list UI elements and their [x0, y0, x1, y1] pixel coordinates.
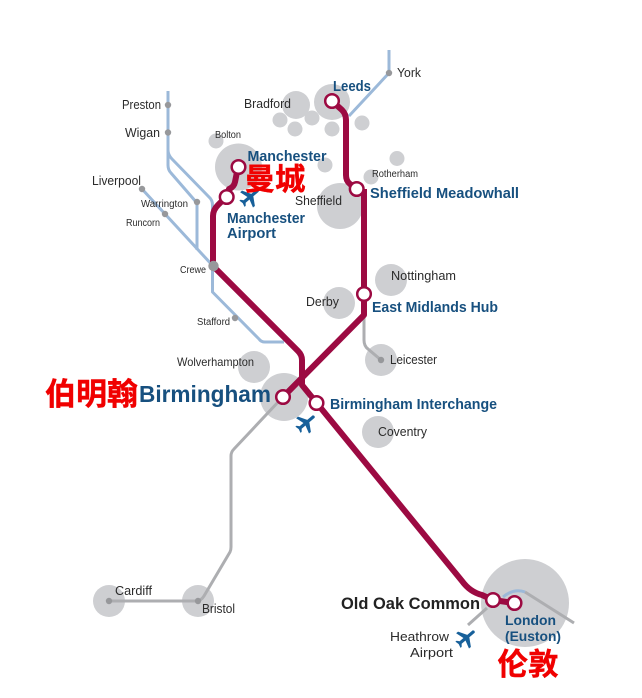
HS2 high speed line [213, 101, 514, 603]
icon: plane Birmingham Interchange [292, 408, 321, 437]
secondary city labels: Coventry [378, 424, 427, 439]
secondary city labels: Wigan [125, 125, 160, 140]
station labels: Birmingham Interchange [330, 396, 497, 413]
classic lines: grey [109, 315, 574, 625]
secondary city labels [92, 65, 456, 660]
secondary city labels: Bradford [244, 96, 291, 111]
secondary city labels: Liverpool [92, 173, 141, 188]
secondary city labels: Leicester [390, 352, 438, 367]
station labels: Birmingham [139, 381, 271, 407]
secondary city labels: York [397, 65, 421, 80]
secondary city labels: Warrington [141, 199, 188, 210]
secondary city labels: Derby [306, 294, 339, 309]
station labels: Sheffield Meadowhall [370, 185, 519, 202]
secondary city labels: Wolverhampton [177, 355, 254, 369]
station labels: Old Oak Common [341, 594, 480, 613]
secondary city labels: Bristol [202, 601, 235, 616]
station labels: (Euston) [505, 628, 561, 644]
HS2 stations [220, 94, 521, 610]
secondary city labels: Nottingham [391, 268, 456, 283]
classic lines: blue [142, 50, 525, 597]
icon: plane Manchester Airport [236, 182, 265, 211]
interchange dots [106, 70, 392, 604]
icon: plane Heathrow [452, 623, 481, 652]
station labels: East Midlands Hub [372, 299, 498, 316]
Chinese label: London: 伦敦 [498, 648, 558, 682]
station labels [139, 78, 561, 644]
secondary city labels: Airport [410, 645, 453, 660]
secondary city labels: Heathrow [390, 629, 450, 644]
secondary city labels: Cardiff [115, 583, 152, 598]
secondary city labels: Preston [122, 97, 161, 112]
secondary city labels: Bolton [215, 130, 241, 141]
secondary city labels: Crewe [180, 265, 206, 276]
station labels: Leeds [333, 78, 371, 95]
Chinese label: Manchester: 曼城 [244, 163, 306, 197]
station labels: London [505, 612, 556, 628]
secondary city labels: Runcorn [126, 218, 160, 229]
secondary city labels: Sheffield [295, 193, 342, 208]
station labels: Manchester [227, 210, 305, 227]
station labels: Airport [227, 225, 276, 242]
station labels: Manchester [248, 148, 327, 165]
Chinese label: Birmingham: 伯明翰 [45, 377, 138, 412]
city circles [93, 84, 569, 647]
secondary city labels: Stafford [197, 317, 230, 328]
secondary city labels: Rotherham [372, 169, 418, 180]
